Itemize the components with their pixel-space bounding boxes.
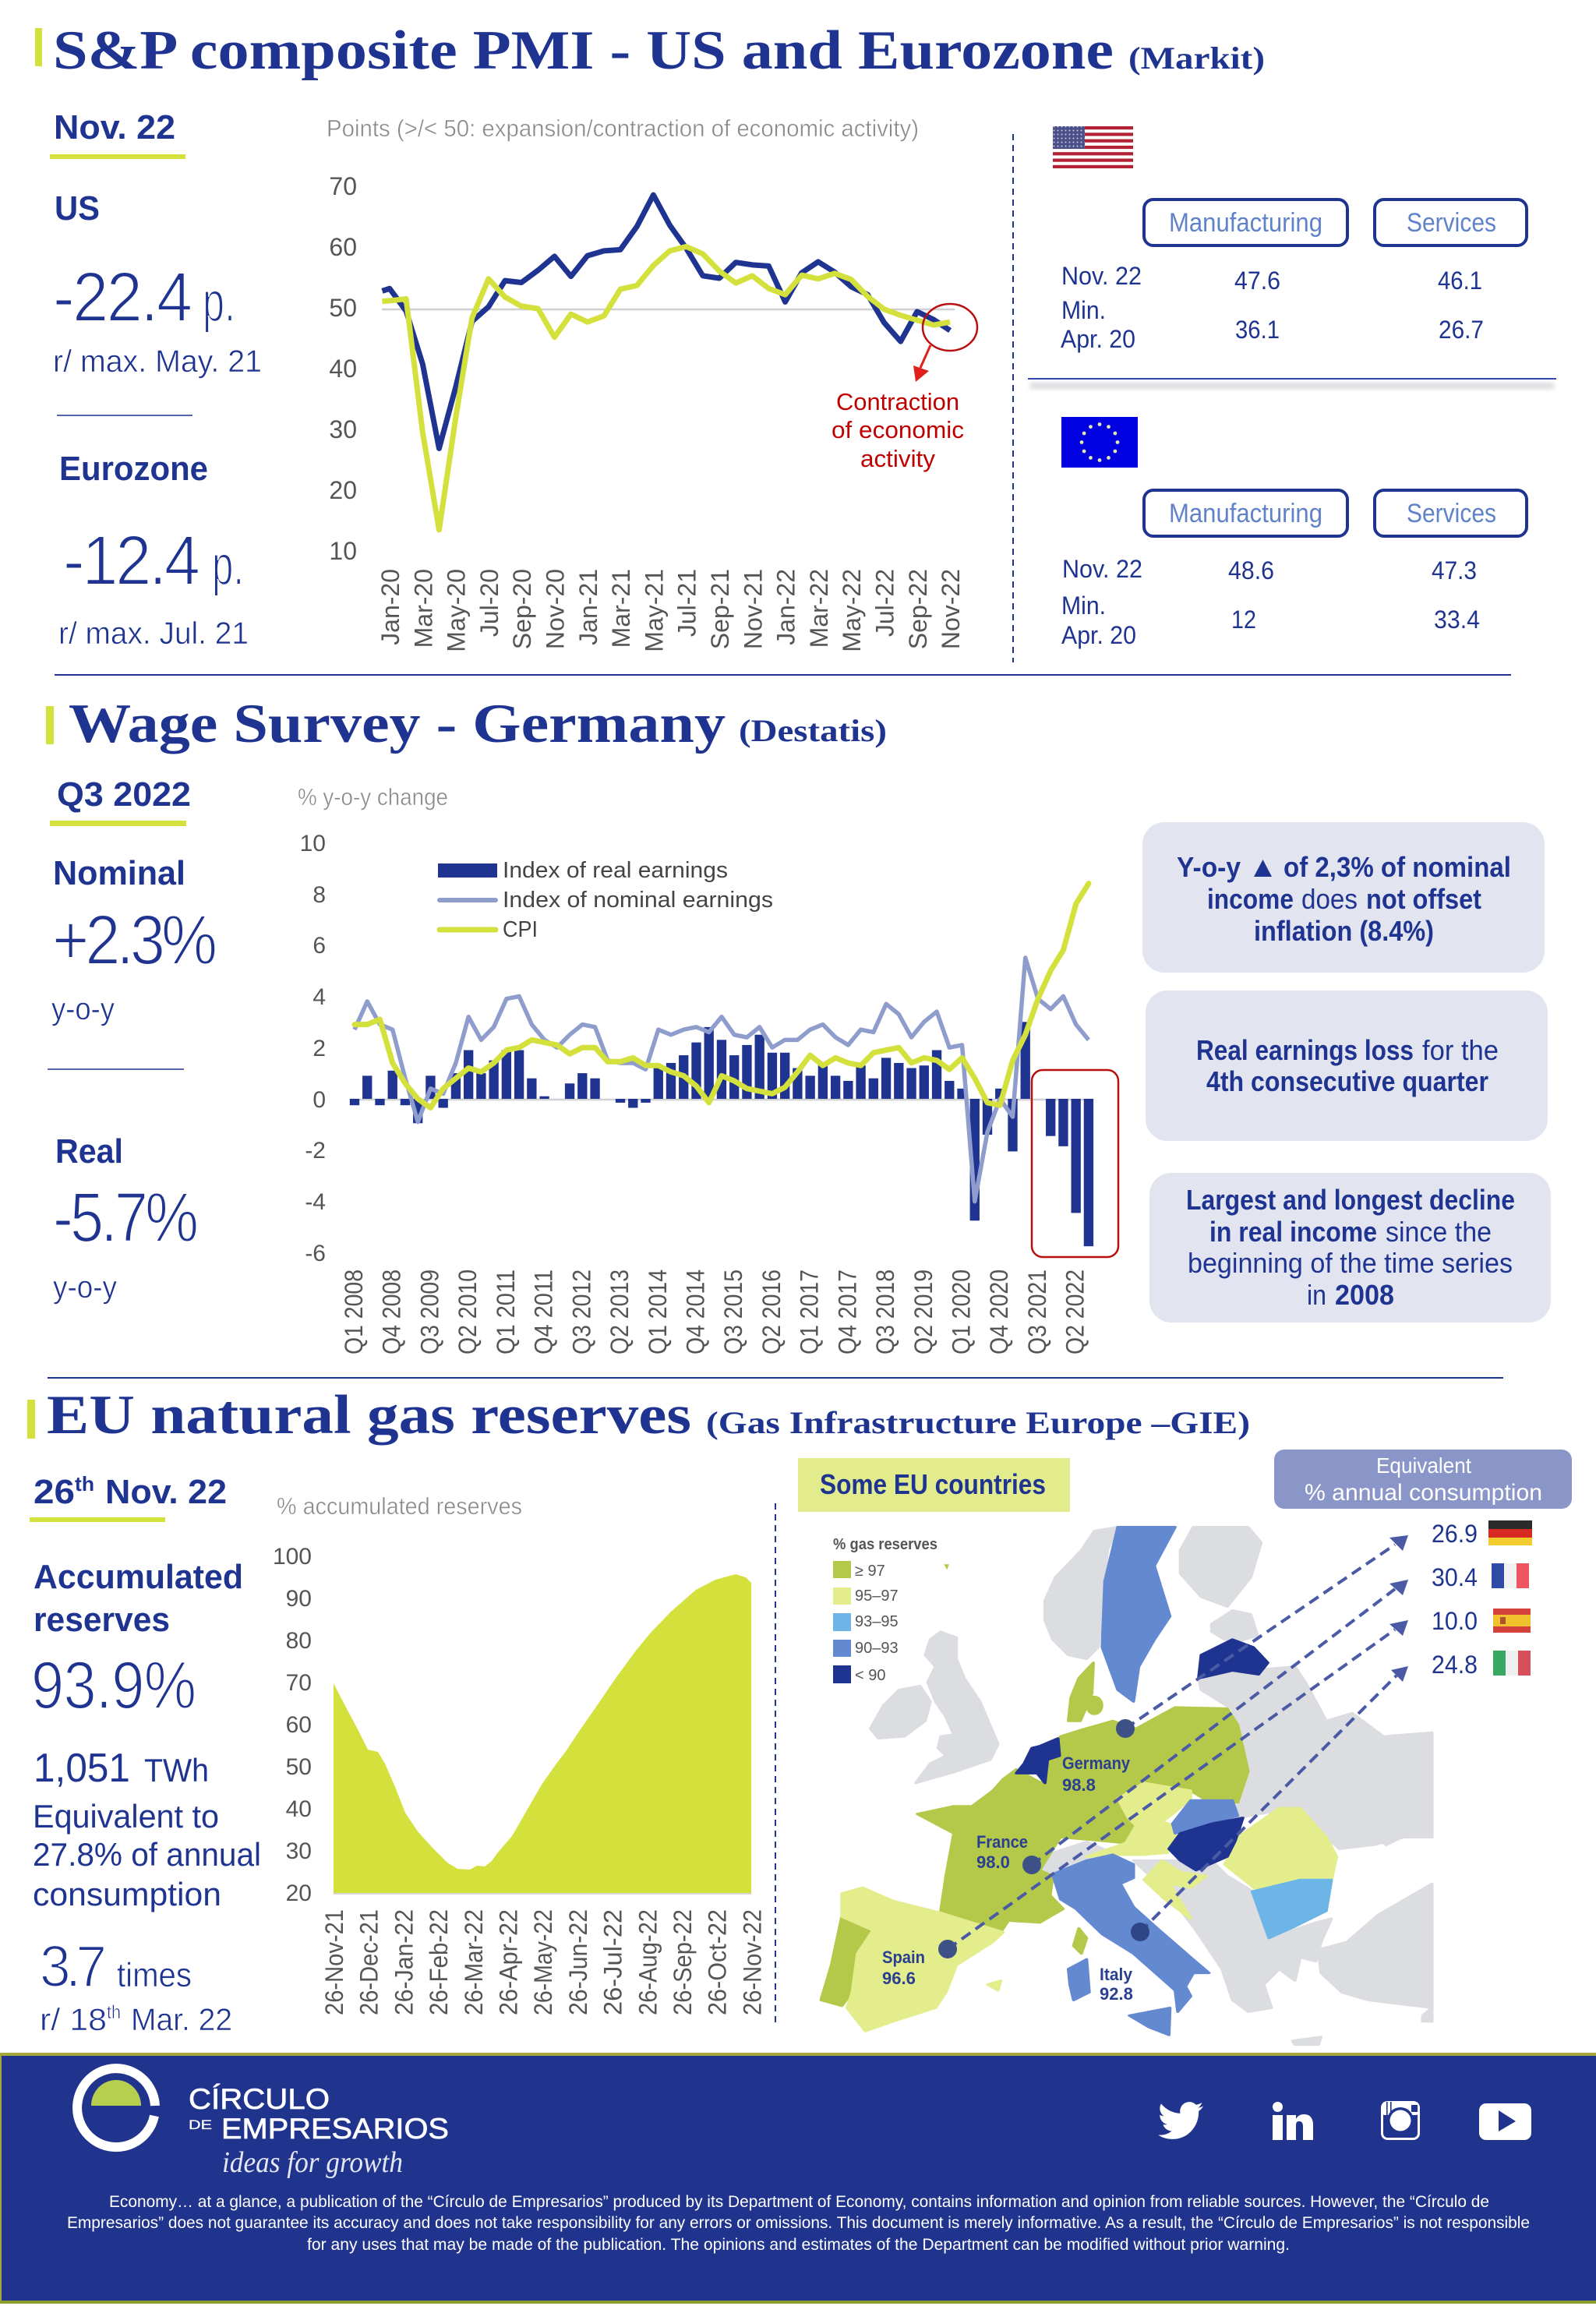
equivalence note: Equivalent to <box>33 1798 219 1835</box>
combo chart: earnings and CPI: Q3 2009 <box>415 1270 443 1354</box>
chart caption: Points (>/< 50: expansion/contraction of economic activity) <box>327 115 919 142</box>
logo: Círculo de Empresarios: EMPRESARIOS <box>221 2113 449 2145</box>
area chart: accumulated reserves: 40 <box>286 1796 312 1822</box>
title accent bar <box>27 1400 35 1439</box>
country labels: Spain <box>882 1948 925 1967</box>
combo chart: earnings and CPI: Q2 2022 <box>1061 1270 1089 1354</box>
panel: US PMI table: 36.1 <box>1235 316 1280 344</box>
combo chart: earnings and CPI: Q1 2008 <box>340 1270 368 1354</box>
button: Services: Services <box>1407 208 1496 238</box>
icon: EU flag <box>1061 417 1138 468</box>
equivalence note <box>33 1798 261 1912</box>
panel: US PMI table: Nov. 22 <box>1061 262 1142 290</box>
energy value: TWh <box>144 1752 209 1789</box>
title accent bar <box>35 28 42 66</box>
section: Wage Survey Germany <box>46 694 1551 1354</box>
Real heading: Real <box>55 1132 123 1171</box>
callout: nominal income vs inflation: not offset <box>1366 883 1481 915</box>
callout: nominal income vs inflation: income <box>1207 883 1294 915</box>
date underline <box>50 154 185 159</box>
callout: nominal income vs inflation: of 2,3% of nominal <box>1284 851 1511 883</box>
icon: Italy flag <box>1493 1651 1531 1676</box>
callout: largest and longest decline: 2008 <box>1335 1279 1394 1311</box>
icon: Instagram <box>1382 2102 1418 2138</box>
callout: nominal income vs inflation: Y-o-y <box>1177 851 1241 883</box>
heading: accumulated reserves: Accumulated <box>34 1558 243 1596</box>
source: (Markit) <box>1128 41 1265 76</box>
line chart: PMI US and Eurozone: 50 <box>329 294 357 322</box>
callout: largest and longest decline <box>1149 1173 1551 1323</box>
title: Wage Survey - Germany <box>69 694 726 754</box>
line chart: PMI US and Eurozone: Jul-22 <box>871 569 899 637</box>
combo chart: earnings and CPI: -6 <box>305 1241 326 1266</box>
label: equivalent annual consumption: Equivalent <box>1376 1453 1471 1478</box>
line chart: PMI US and Eurozone: 10 <box>329 537 357 565</box>
country labels: France <box>976 1832 1028 1852</box>
multiple value <box>40 1934 192 1999</box>
line chart: PMI US and Eurozone: Mar-20 <box>409 569 437 648</box>
line chart: PMI US and Eurozone: Nov-22 <box>937 569 965 649</box>
callout: real earnings loss: Real earnings loss <box>1196 1034 1414 1066</box>
Eurozone unit: p. <box>212 535 244 597</box>
area chart: accumulated reserves: 26-Nov-22 <box>738 1909 766 2015</box>
button: Services <box>1375 490 1527 536</box>
reserves value: 93.9% <box>31 1649 196 1723</box>
date heading: Nov. 22 <box>105 1473 227 1511</box>
label: Some EU countries <box>798 1458 1070 1512</box>
line chart: PMI US and Eurozone: Sep-20 <box>508 569 536 649</box>
US unit: p. <box>203 271 235 334</box>
area chart: accumulated reserves: 26-Oct-22 <box>704 1909 732 2015</box>
combo chart: earnings and CPI: Q3 2018 <box>871 1270 899 1354</box>
heading: accumulated reserves: reserves <box>34 1601 170 1639</box>
area chart: accumulated reserves: 26-Jul-22 <box>599 1909 627 2015</box>
multiple note: r/ 18 <box>40 2003 107 2037</box>
country labels: Germany <box>1062 1753 1131 1773</box>
button: Manufacturing: Manufacturing <box>1169 499 1322 528</box>
date underline <box>30 1517 165 1522</box>
combo chart: earnings and CPI: Q3 2021 <box>1023 1270 1051 1354</box>
area chart: accumulated reserves: 26-May-22 <box>529 1909 557 2015</box>
area chart: accumulated reserves: 30 <box>286 1838 312 1864</box>
US heading: US <box>55 189 100 228</box>
callout: contraction of economic activity: of economic <box>832 416 964 443</box>
map legend: ≥ 97 <box>855 1563 885 1580</box>
combo chart: earnings and CPI: -2 <box>305 1138 326 1164</box>
combo chart: earnings and CPI: Q4 2017 <box>833 1270 861 1354</box>
footer <box>0 2053 1596 2304</box>
line chart: PMI US and Eurozone: 40 <box>329 355 357 383</box>
area chart: accumulated reserves: 26-Nov-21 <box>320 1909 348 2015</box>
US note: r/ max. May. 21 <box>53 344 262 379</box>
area chart: accumulated reserves: 26-Apr-22 <box>494 1909 522 2015</box>
line chart: PMI US and Eurozone: May-20 <box>443 569 471 652</box>
combo chart: earnings and CPI: -4 <box>305 1189 326 1215</box>
multiple note <box>40 2002 232 2037</box>
button: Manufacturing <box>1144 200 1347 245</box>
legend <box>438 858 773 942</box>
combo chart: earnings and CPI: Q2 2019 <box>909 1270 937 1354</box>
area chart: accumulated reserves: 20 <box>286 1880 312 1906</box>
country labels <box>882 1753 1133 2004</box>
panel: US PMI table: 26.7 <box>1439 316 1484 344</box>
date heading: Nov. 22 <box>54 108 175 147</box>
arrow: Spain <box>938 1620 1408 1958</box>
disclaimer: for any uses that may be made of the publication. The opinions and estimates of the Department can be modified without prior warning. <box>307 2236 1290 2254</box>
combo chart: earnings and CPI: Q4 2020 <box>985 1270 1013 1354</box>
area chart: accumulated reserves: 80 <box>286 1628 312 1654</box>
chart caption: % accumulated reserves <box>277 1492 522 1520</box>
panel: Eurozone PMI table: Min. <box>1061 592 1106 620</box>
icon: Twitter <box>1158 2102 1203 2139</box>
multiple note: Mar. 22 <box>131 2003 232 2037</box>
panel: country annual consumption: 26.9 <box>1432 1520 1478 1548</box>
panel: country annual consumption <box>1432 1520 1532 1679</box>
date heading <box>34 1472 227 1511</box>
panel: US PMI table: 46.1 <box>1438 267 1482 295</box>
section: S&P composite PMI <box>35 20 1556 662</box>
button: Services: Services <box>1407 499 1496 528</box>
icon: France flag <box>1492 1563 1529 1588</box>
button: Manufacturing: Manufacturing <box>1169 208 1322 238</box>
label: equivalent annual consumption: % annual consumption <box>1305 1480 1542 1506</box>
combo chart: earnings and CPI: 2 <box>312 1036 326 1061</box>
combo chart: earnings and CPI: Q1 2020 <box>948 1270 976 1354</box>
line: nominal earnings <box>355 958 1089 1202</box>
country labels: 96.6 <box>882 1969 916 1988</box>
panel: Eurozone PMI table <box>1061 417 1527 649</box>
combo chart: earnings and CPI <box>300 831 1118 1354</box>
line chart: PMI US and Eurozone: 70 <box>329 172 357 200</box>
combo chart: earnings and CPI: Q4 2011 <box>530 1270 558 1354</box>
line chart: PMI US and Eurozone: 20 <box>329 476 357 504</box>
line chart: PMI US and Eurozone: May-21 <box>640 569 668 652</box>
legend: Index of real earnings <box>503 858 728 883</box>
95 to 97 <box>842 1783 1336 2031</box>
line chart: PMI US and Eurozone: 60 <box>329 233 357 261</box>
combo chart: earnings and CPI: 10 <box>300 831 326 856</box>
combo chart: earnings and CPI: 6 <box>312 933 326 959</box>
panel: country annual consumption: 24.8 <box>1432 1651 1478 1679</box>
callout: nominal income vs inflation: inflation (8.4%) <box>1254 915 1434 947</box>
line chart: PMI US and Eurozone: Sep-21 <box>706 569 734 649</box>
combo chart: earnings and CPI: Q2 2010 <box>454 1270 482 1354</box>
panel: Eurozone PMI table: 48.6 <box>1228 556 1274 584</box>
area chart: accumulated reserves: 26-Sep-22 <box>669 1909 697 2015</box>
map legend: 90–93 <box>855 1640 899 1657</box>
combo chart: earnings and CPI: Q2 2013 <box>606 1270 634 1354</box>
US value: -22.4 <box>53 259 192 337</box>
icon: Spain flag <box>1493 1609 1531 1633</box>
energy value: 1,051 <box>34 1746 130 1791</box>
Nominal heading: Nominal <box>53 854 185 892</box>
area chart: accumulated reserves: 26-Feb-22 <box>425 1909 453 2015</box>
label: Some EU countries: Some EU countries <box>820 1468 1046 1500</box>
panel: US PMI table <box>1053 126 1527 353</box>
title: EU natural gas reserves <box>47 1385 691 1446</box>
area chart: accumulated reserves: 60 <box>286 1712 312 1738</box>
multiple value: times <box>117 1956 192 1994</box>
90 to 93 <box>1053 1527 1238 2035</box>
equivalence note: 27.8% of annual <box>33 1836 261 1873</box>
combo chart: earnings and CPI: Q1 2017 <box>796 1270 824 1354</box>
Eurozone value: -12.4 <box>63 522 200 600</box>
country labels: 92.8 <box>1100 1984 1133 2004</box>
highlight box: last four quarters <box>1032 1070 1118 1257</box>
line chart: PMI US and Eurozone: 30 <box>329 415 357 443</box>
callout: contraction of economic activity: Contraction <box>836 388 959 415</box>
Nominal value: +2.3% <box>52 901 217 980</box>
line chart: PMI US and Eurozone: Jan-21 <box>574 569 602 645</box>
combo chart: earnings and CPI: Q3 2012 <box>567 1270 595 1354</box>
bars: real earnings <box>350 1022 1093 1246</box>
callout: largest and longest decline: since the <box>1386 1216 1492 1248</box>
line chart: PMI US and Eurozone: Jul-20 <box>475 569 503 637</box>
logo: Círculo de Empresarios: CÍRCULO <box>189 2083 330 2115</box>
energy value <box>34 1746 209 1791</box>
callout: largest and longest decline: in real income <box>1209 1216 1377 1248</box>
area chart: accumulated reserves: 100 <box>273 1544 312 1570</box>
Eurozone series <box>382 246 950 530</box>
callout: real earnings loss: 4th consecutive quarter <box>1206 1065 1488 1097</box>
line chart: PMI US and Eurozone: Jan-22 <box>772 569 800 645</box>
line chart: PMI US and Eurozone: Nov-20 <box>541 569 569 649</box>
callout: contraction of economic activity: activity <box>860 445 935 472</box>
logo: Círculo de Empresarios <box>77 2068 449 2179</box>
multiple note: th <box>107 2002 121 2023</box>
date underline <box>50 821 186 826</box>
panel: Eurozone PMI table: 47.3 <box>1432 556 1477 584</box>
panel: country annual consumption: 10.0 <box>1432 1607 1478 1635</box>
panel: US PMI table: 47.6 <box>1234 267 1280 295</box>
source: (Gas Infrastructure Europe –GIE) <box>706 1405 1250 1440</box>
callout: real earnings loss <box>1146 991 1548 1141</box>
icon: US flag <box>1053 126 1133 168</box>
map legend: 95–97 <box>855 1587 899 1605</box>
country labels: 98.8 <box>1062 1775 1096 1795</box>
panel: PMI key figures <box>50 108 262 651</box>
combo chart: earnings and CPI: Q1 2014 <box>644 1270 672 1354</box>
area chart: accumulated reserves <box>273 1544 766 2015</box>
disclaimer: Empresarios” does not guarantee its accuracy and does not take responsibility for any errors or omissions. This document is merely informative. As a result, the “Círculo de Empresarios” is not responsible <box>67 2214 1530 2232</box>
panel: US PMI table: Min. <box>1061 296 1106 324</box>
Eurozone note: r/ max. Jul. 21 <box>58 616 249 651</box>
line chart: PMI US and Eurozone: May-22 <box>838 569 866 652</box>
source: (Destatis) <box>739 713 887 748</box>
US series <box>382 195 950 448</box>
arrow: Italy <box>1131 1666 1408 1941</box>
multiple value: 3.7 <box>40 1934 107 1999</box>
chart caption: % y-o-y change <box>298 783 448 810</box>
97 and over <box>821 1564 1248 2006</box>
combo chart: earnings and CPI: 8 <box>312 882 326 908</box>
icon: LinkedIn <box>1273 2102 1313 2140</box>
date heading: Q3 2022 <box>57 775 191 814</box>
area chart: accumulated reserves: 50 <box>286 1754 312 1780</box>
callout: contraction of economic activity <box>832 304 977 472</box>
combo chart: earnings and CPI: Q4 2008 <box>378 1270 406 1354</box>
map legend: 93–95 <box>855 1613 899 1630</box>
map legend: < 90 <box>855 1667 885 1684</box>
line chart: PMI US and Eurozone: Jul-21 <box>673 569 701 637</box>
area chart: accumulated reserves: 26-Jun-22 <box>564 1909 592 2015</box>
map: EU gas reserves by country <box>821 1527 1432 2045</box>
area chart: accumulated reserves: 70 <box>286 1670 312 1696</box>
Real note: y-o-y <box>53 1270 117 1305</box>
label: equivalent annual consumption <box>1274 1450 1572 1509</box>
legend: CPI <box>503 917 538 942</box>
panel: gas key figures <box>30 1472 261 2037</box>
callout: largest and longest decline: Largest and longest decline <box>1186 1184 1515 1216</box>
heading: accumulated reserves <box>34 1558 243 1639</box>
line chart: PMI US and Eurozone: Nov-21 <box>739 569 767 649</box>
grey land <box>870 1527 1432 2045</box>
area chart: accumulated reserves: 26-Dec-21 <box>355 1909 383 2015</box>
logo: Círculo de Empresarios: ideas for growth <box>222 2146 403 2179</box>
equivalence note: consumption <box>33 1876 221 1912</box>
93 to 95 <box>1252 1880 1332 1938</box>
title accent bar <box>46 706 54 744</box>
line: CPI <box>355 884 1089 1108</box>
under 90 <box>1016 1640 1268 1870</box>
area chart: accumulated reserves: 26-Aug-22 <box>634 1909 662 2015</box>
callout: largest and longest decline: beginning of the time series <box>1188 1247 1513 1279</box>
Nominal note: y-o-y <box>51 992 115 1026</box>
panel: US PMI table: Apr. 20 <box>1061 325 1135 353</box>
Eurozone heading: Eurozone <box>59 450 208 488</box>
line chart: PMI US and Eurozone: Mar-21 <box>607 569 635 648</box>
panel: Eurozone PMI table: Apr. 20 <box>1061 621 1136 649</box>
callout: largest and longest decline: in <box>1307 1279 1326 1311</box>
button: Manufacturing <box>1144 490 1347 536</box>
line chart: PMI US and Eurozone: Jan-20 <box>376 569 404 645</box>
icon: YouTube <box>1479 2103 1531 2140</box>
disclaimer <box>67 2193 1530 2254</box>
map legend: % gas reserves <box>833 1536 937 1553</box>
callout: nominal income vs inflation <box>1142 822 1545 973</box>
combo chart: earnings and CPI: 0 <box>312 1087 326 1113</box>
disclaimer: Economy… at a glance, a publication of the “Círculo de Empresarios” produced by its Department of Economy, contains information and opinion from reliable sources. However, the “Círculo de <box>109 2193 1489 2211</box>
area chart: accumulated reserves: 26-Jan-22 <box>390 1909 418 2015</box>
combo chart: earnings and CPI: Q3 2015 <box>719 1270 747 1354</box>
callout: nominal income vs inflation: does <box>1301 883 1358 915</box>
line chart: PMI US and Eurozone <box>329 172 965 652</box>
button: Services <box>1375 200 1527 245</box>
arrow: Germany <box>1116 1535 1408 1738</box>
date heading: 26 <box>34 1473 75 1511</box>
legend: Index of nominal earnings <box>503 888 773 913</box>
combo chart: earnings and CPI: 4 <box>312 984 326 1010</box>
callout: real earnings loss: for the <box>1422 1034 1499 1066</box>
icon: Germany flag <box>1488 1520 1532 1545</box>
country labels: Italy <box>1100 1965 1133 1984</box>
panel: Eurozone PMI table: 12 <box>1231 606 1256 634</box>
map legend <box>833 1536 937 1684</box>
section: EU natural gas reserves <box>27 1385 1572 2045</box>
area chart: accumulated reserves: 26-Mar-22 <box>460 1909 488 2015</box>
combo chart: earnings and CPI: Q1 2011 <box>492 1270 520 1354</box>
logo: Círculo de Empresarios: DE <box>189 2117 212 2132</box>
combo chart: earnings and CPI: Q4 2014 <box>681 1270 709 1354</box>
panel: Eurozone PMI table: Nov. 22 <box>1062 555 1142 583</box>
Real value: -5.7% <box>53 1178 199 1256</box>
panel: Eurozone PMI table: 33.4 <box>1434 606 1480 634</box>
line chart: PMI US and Eurozone: Mar-22 <box>805 569 833 648</box>
line chart: PMI US and Eurozone: Sep-22 <box>904 569 932 649</box>
title: S&P composite PMI - US and Eurozone <box>53 20 1114 81</box>
combo chart: earnings and CPI: Q2 2016 <box>757 1270 786 1354</box>
country labels: 98.0 <box>976 1852 1010 1872</box>
date heading: th <box>75 1472 94 1496</box>
area chart: accumulated reserves: 90 <box>286 1586 312 1612</box>
arrow: France <box>1022 1580 1408 1874</box>
panel: wage key figures <box>48 775 217 1305</box>
panel: country annual consumption: 30.4 <box>1432 1563 1478 1591</box>
